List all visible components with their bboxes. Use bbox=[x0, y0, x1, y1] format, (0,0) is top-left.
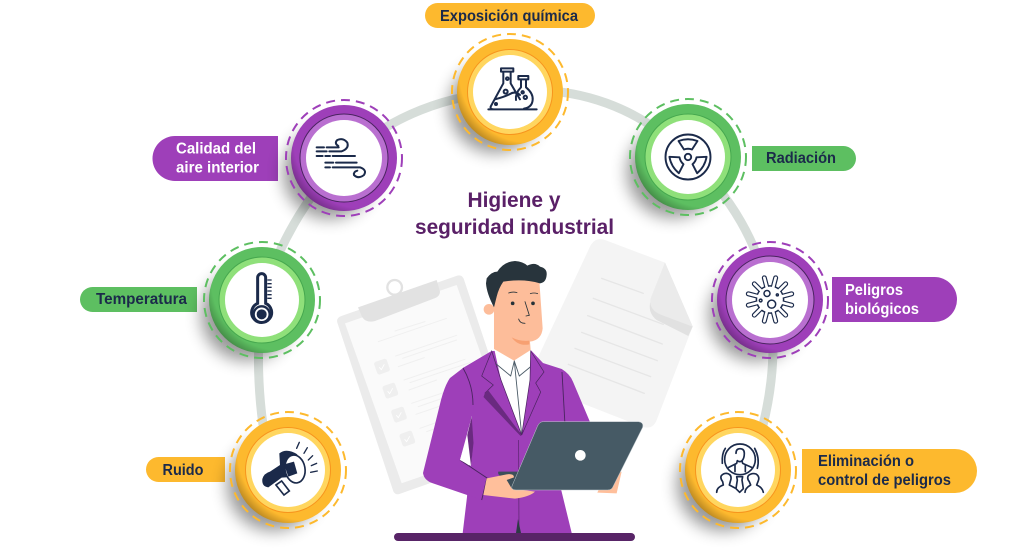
icon: virus bbox=[748, 278, 792, 321]
label pill bbox=[146, 457, 225, 482]
ring bbox=[627, 99, 746, 218]
shirt bbox=[494, 348, 531, 435]
label pill bbox=[425, 3, 595, 28]
node: Temperatura bbox=[80, 242, 320, 361]
title bbox=[415, 189, 614, 239]
neck and face bbox=[484, 261, 547, 361]
icon: wind bbox=[317, 139, 365, 177]
title: Higiene y bbox=[468, 189, 561, 212]
node: Peligros biológicos: Peligros bbox=[845, 282, 903, 299]
left arm bbox=[423, 351, 492, 500]
node: Peligros biológicos bbox=[709, 242, 957, 361]
lapels bbox=[482, 351, 522, 435]
ring bbox=[677, 412, 796, 531]
icon: flasks bbox=[488, 68, 537, 109]
icon: people search bbox=[717, 444, 763, 492]
node: Calidad del aire interior: Calidad del bbox=[176, 140, 256, 158]
document illustration bbox=[527, 239, 693, 428]
node: Eliminación o control de peligros: control de peligros bbox=[818, 472, 951, 489]
icon: megaphone bbox=[262, 442, 317, 495]
label pill bbox=[802, 449, 977, 493]
ring bbox=[201, 242, 320, 361]
label pill bbox=[832, 277, 957, 322]
connecting arc bbox=[258, 91, 773, 425]
ring bbox=[227, 412, 346, 531]
node: Temperatura: Temperatura bbox=[96, 291, 187, 308]
title: seguridad industrial bbox=[415, 216, 614, 239]
node: Exposición química: Exposición química bbox=[440, 8, 578, 25]
person illustration bbox=[394, 261, 643, 541]
node: Radiación: Radiación bbox=[766, 150, 836, 167]
base bar bbox=[394, 533, 635, 541]
label pill bbox=[153, 136, 278, 181]
node: Eliminación o control de peligros: Eliminación o bbox=[818, 453, 914, 470]
node: Radiación bbox=[627, 99, 856, 218]
eyes and mouth bbox=[511, 301, 514, 305]
icon: thermometer bbox=[252, 274, 272, 322]
ring bbox=[709, 242, 828, 361]
icon: radiation bbox=[666, 134, 710, 180]
node: Ruido bbox=[146, 412, 346, 531]
ring bbox=[283, 100, 402, 219]
node: Calidad del aire interior: aire interior bbox=[176, 160, 259, 176]
clipboard illustration bbox=[337, 275, 520, 494]
node: Ruido: Ruido bbox=[162, 462, 204, 479]
jacket body bbox=[463, 350, 590, 533]
label pill bbox=[80, 287, 197, 312]
node: Exposición química bbox=[425, 3, 595, 153]
hair bbox=[486, 261, 547, 307]
hands and laptop bbox=[483, 422, 643, 499]
label pill bbox=[752, 146, 856, 171]
node: Calidad del aire interior bbox=[153, 100, 402, 219]
node: Eliminación o control de peligros bbox=[677, 412, 977, 531]
node: Peligros biológicos: biológicos bbox=[845, 301, 919, 318]
ring bbox=[449, 34, 568, 153]
